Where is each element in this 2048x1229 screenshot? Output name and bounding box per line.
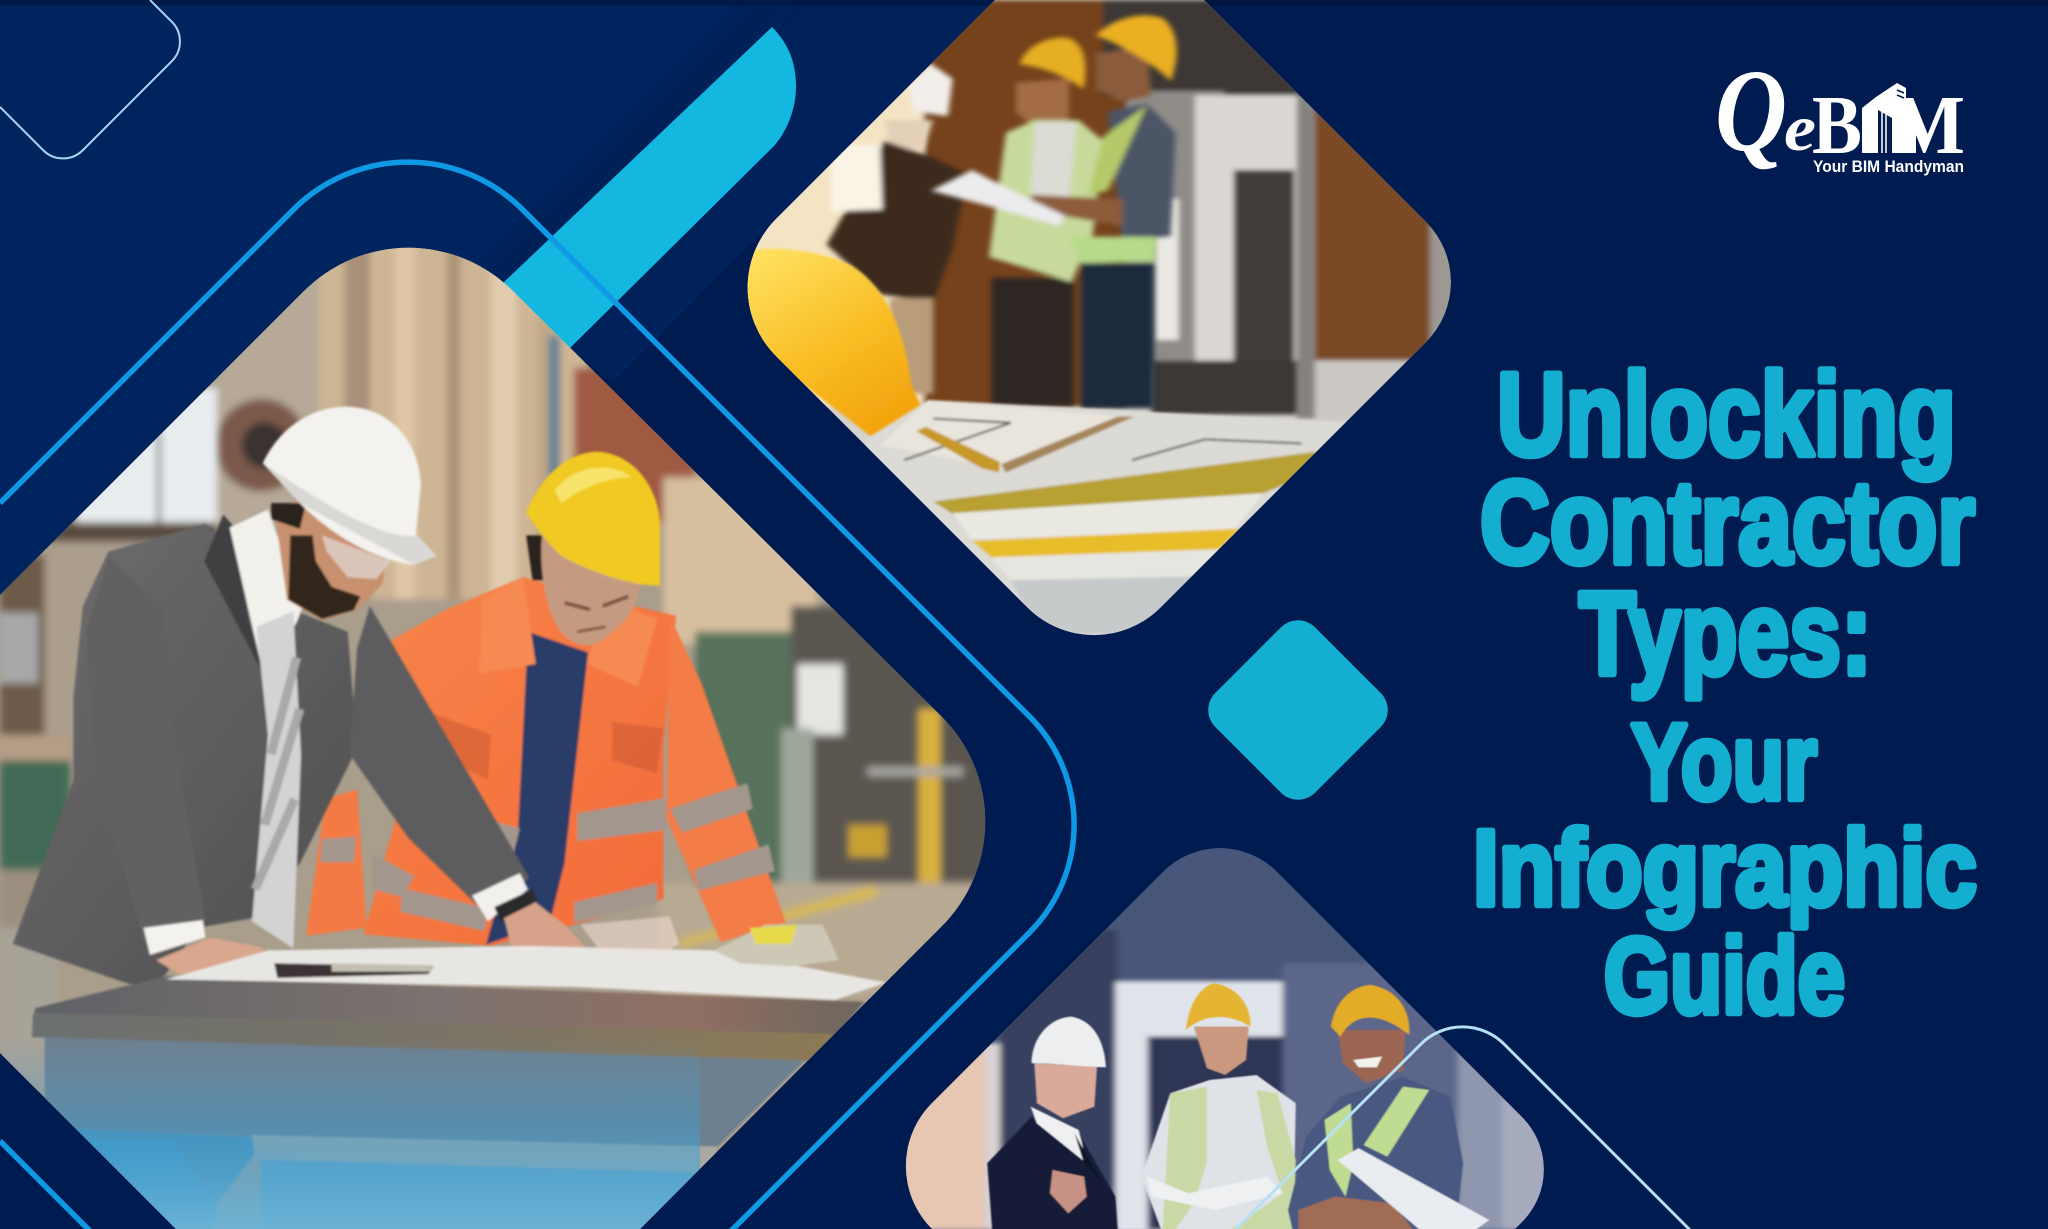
- logo: e: [1784, 92, 1816, 165]
- thin white-blue rounded line over bottom photo: [1236, 1027, 1691, 1229]
- bright blue corner line bottom-left: [0, 1141, 92, 1229]
- logo mark letters: Q: [1715, 45, 1787, 176]
- blueprint on table: [32, 916, 887, 1229]
- blue fade at bottom of photo: [0, 1040, 700, 1229]
- two workers in hi-vis vests: [931, 15, 1177, 408]
- thin rounded diamond outline top-left: [0, 0, 180, 158]
- table with plans, tape and ruler: [865, 400, 1350, 655]
- logo tagline: Your BIM Handyman: [1813, 158, 1964, 176]
- yellow hard hat: [739, 249, 926, 444]
- left contractor in suit: [987, 1017, 1118, 1229]
- background person in white helmet: [827, 62, 967, 394]
- photo: crew with yellow hard hats on site: [720, 0, 1460, 655]
- title line: Types: Types:: [1579, 568, 1872, 700]
- title line: Infographic: Infographic: [1473, 807, 1977, 928]
- bright blue rounded outline around main photo: [0, 162, 1074, 1229]
- title line: Guide: Guide: [1604, 915, 1845, 1036]
- middle contractor with vest: [1142, 983, 1296, 1229]
- cyan accent bar: [503, 27, 796, 348]
- site background: [720, 0, 1459, 421]
- title: [1473, 349, 1977, 1036]
- logo: M: [1892, 79, 1965, 172]
- corridor background: [880, 830, 1549, 1229]
- right contractor in plaid: [1288, 985, 1489, 1229]
- logo building icon: [1862, 83, 1916, 153]
- factory background: [0, 239, 995, 1089]
- title line: Your: Your: [1631, 701, 1817, 822]
- logo: [1715, 45, 1965, 176]
- logo: B: [1812, 79, 1862, 172]
- photo: three contractors smiling: [880, 830, 1550, 1229]
- manager in grey suit: [13, 407, 603, 992]
- worker in orange jacket: [306, 452, 786, 946]
- centre cyan diamond: [1198, 610, 1398, 810]
- photo: manager and worker reviewing blueprint: [0, 180, 1060, 1229]
